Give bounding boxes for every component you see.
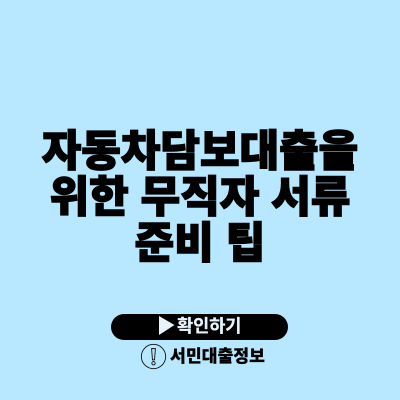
title: 자동차담보대출을 bbox=[42, 128, 358, 176]
button label: 확인하기 bbox=[177, 316, 241, 336]
icon: exclamation in circle bbox=[140, 344, 166, 370]
title bbox=[41, 128, 358, 268]
brand name: 서민대출정보 bbox=[170, 346, 265, 366]
title: 준비 팁 bbox=[135, 220, 265, 268]
title: 위한 무직자 서류 bbox=[50, 174, 350, 222]
button: confirm bbox=[111, 314, 288, 340]
icon: play triangle bbox=[159, 316, 174, 335]
